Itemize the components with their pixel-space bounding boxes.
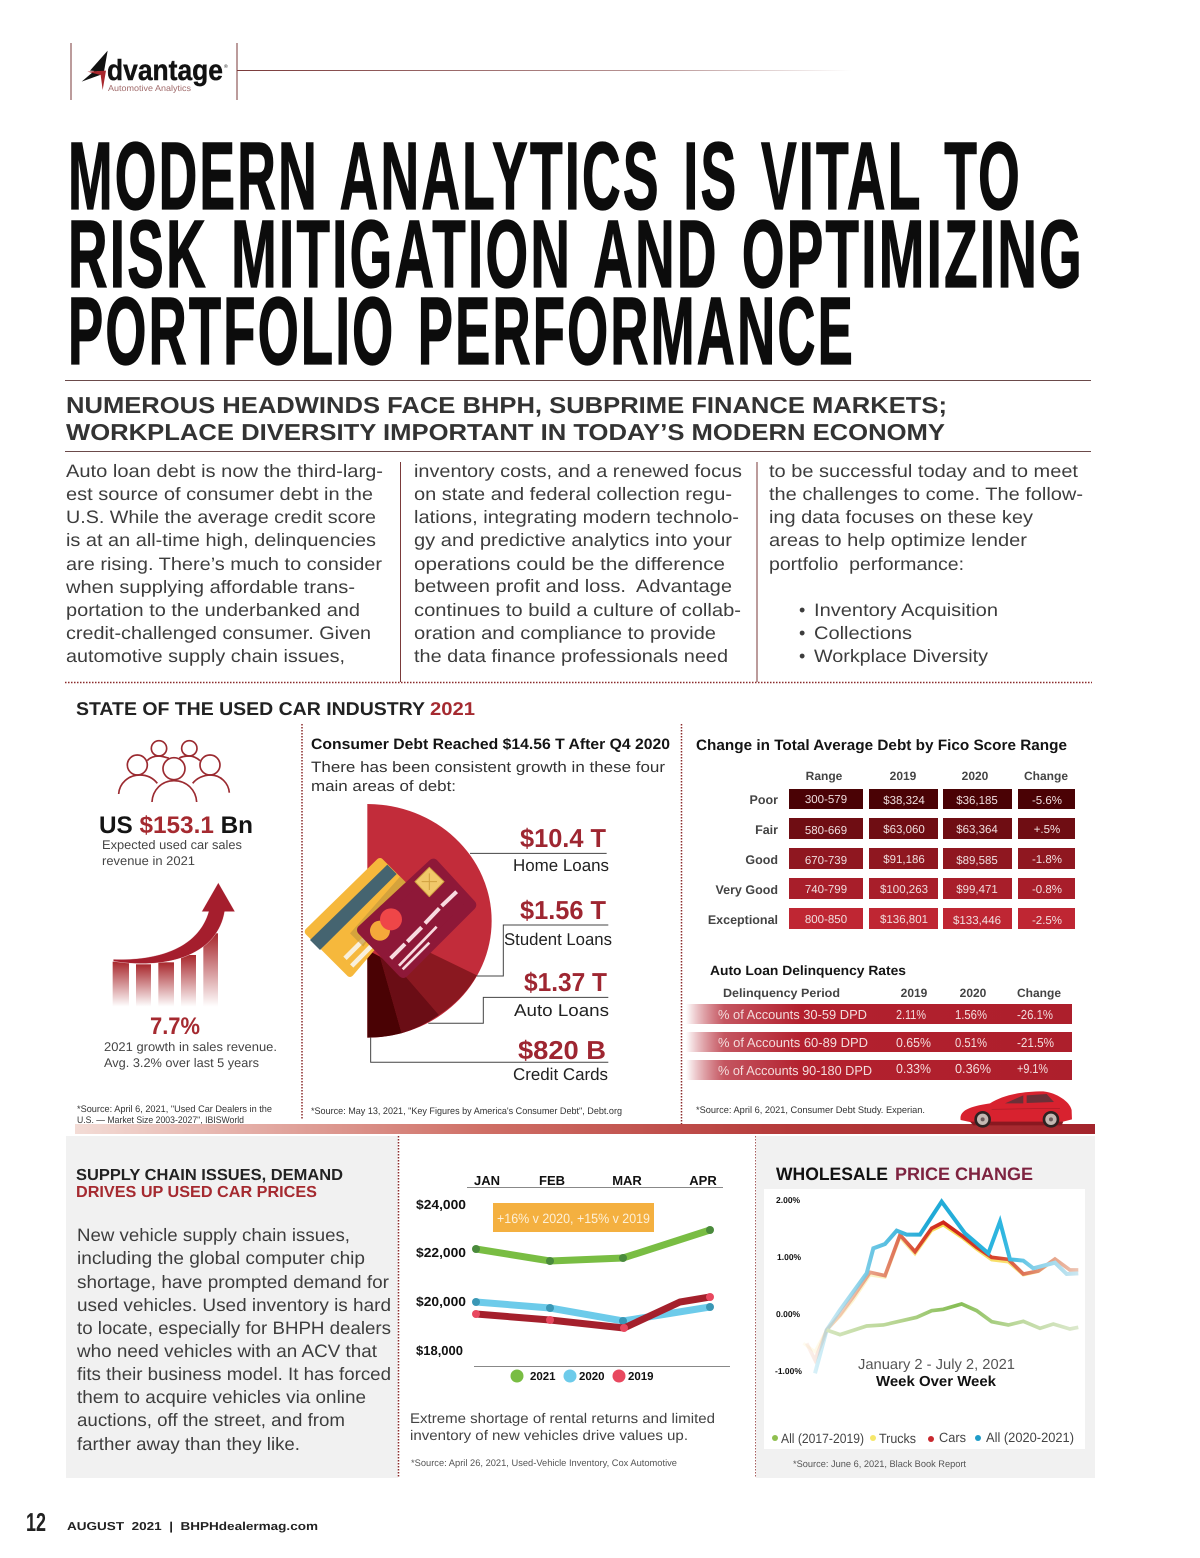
legend: Trucks <box>879 1431 916 1446</box>
body text: shortage, have prompted demand for <box>77 1272 389 1292</box>
row: poor: -5.6% <box>1032 795 1062 807</box>
row: poor: Poor <box>750 793 778 807</box>
intro text column 3 with bullets: Workplace Diversity <box>814 646 988 666</box>
legend: Cars <box>939 1430 966 1445</box>
row: fair: +.5% <box>1034 824 1060 836</box>
body text: used vehicles. Used inventory is hard <box>77 1295 391 1315</box>
label: home loans: Home Loans <box>513 856 609 875</box>
row: exceptional: 800-850 <box>805 914 847 926</box>
intro text column 3 with bullets: • <box>799 600 805 620</box>
caption: inventory of new vehicles drive values up. <box>410 1427 688 1443</box>
month axis: APR <box>689 1173 717 1188</box>
heading: Change in Total Average Debt by Fico Score Range <box>696 737 1067 754</box>
row: exceptional: Exceptional <box>708 913 778 927</box>
column headers: Change <box>1017 986 1061 1000</box>
row: good: Good <box>745 853 778 867</box>
row: good: $91,186 <box>883 854 925 866</box>
row: good <box>745 848 1075 869</box>
percentage axis: 2.00% <box>776 1195 801 1205</box>
caption: Extreme shortage of rental returns and limited <box>410 1410 715 1426</box>
callout: +16% v 2020, +15% v 2019 <box>497 1211 650 1226</box>
chart caption: Week Over Week <box>876 1374 997 1390</box>
heading: Auto Loan Delinquency Rates <box>710 963 906 978</box>
body text: New vehicle supply chain issues, <box>77 1225 350 1245</box>
intro text column 1: are rising. There’s much to consider <box>66 554 382 574</box>
label: home loans <box>513 823 609 875</box>
intro text column 3 with bullets: • <box>799 623 805 643</box>
line: 2021 <box>472 1226 714 1265</box>
row: very good: -0.8% <box>1032 884 1062 896</box>
intro text column 2: lations, integrating modern technolo- <box>414 507 739 527</box>
chart: week over week lines <box>803 1202 1078 1373</box>
row: 90-180 DPD: 0.36% <box>955 1061 991 1076</box>
heading: Consumer Debt Reached $14.56 T After Q4 2020 <box>311 736 670 753</box>
intro: There has been consistent growth in these four <box>311 759 665 776</box>
growth caption <box>104 1040 277 1070</box>
heading: PRICE CHANGE <box>895 1164 1033 1184</box>
heading: WHOLESALE <box>776 1164 888 1184</box>
row: poor: 300-579 <box>805 794 847 806</box>
row: very good: Very Good <box>715 883 778 897</box>
row: 90-180 DPD <box>686 1060 1072 1080</box>
intro text column 3 with bullets: the challenges to come. The follow- <box>769 484 1083 504</box>
intro: main areas of debt: <box>311 778 456 795</box>
row: 30-59 DPD: 2.11% <box>896 1007 926 1022</box>
row: good: 670-739 <box>805 855 847 867</box>
row: very good: $100,263 <box>880 884 928 896</box>
intro text column 1: is at an all-time high, delinquencies <box>66 530 376 550</box>
percentage axis <box>775 1195 802 1376</box>
price axis: $18,000 <box>416 1343 463 1358</box>
icon: yellow card <box>308 862 415 973</box>
heading <box>776 1164 1033 1184</box>
intro text column 1: U.S. While the average credit score <box>66 507 376 527</box>
percentage axis: 1.00% <box>777 1252 802 1262</box>
row: 60-89 DPD <box>686 1032 1072 1052</box>
section heading: state of the used car industry: 2021 <box>430 698 475 719</box>
label: student loans <box>504 895 612 949</box>
month axis <box>467 1173 730 1366</box>
row: 30-59 DPD: % of Accounts 30-59 DPD <box>718 1007 867 1022</box>
callout <box>493 1203 654 1232</box>
row: fair: 580-669 <box>805 825 847 837</box>
row: poor: $38,324 <box>883 795 925 807</box>
row: 60-89 DPD: 0.51% <box>955 1035 987 1050</box>
row: fair: Fair <box>755 823 778 837</box>
revenue caption <box>102 838 242 868</box>
row: poor <box>750 789 1075 809</box>
body text: including the global computer chip <box>77 1248 365 1268</box>
intro text column 2: oration and compliance to provide <box>414 623 716 643</box>
legend: 2019 <box>628 1371 654 1383</box>
month axis: JAN <box>474 1173 500 1188</box>
column headers <box>723 986 1061 1000</box>
intro text column 2: gy and predictive analytics into your <box>414 530 732 550</box>
body text: to locate, especially for BHPH dealers <box>77 1318 391 1338</box>
intro text column 1: automotive supply chain issues, <box>66 646 345 666</box>
intro text column 1 <box>65 461 383 666</box>
source note: *Source: April 6, 2021, Consumer Debt Study. Experian. <box>696 1105 925 1116</box>
intro text column 2: on state and federal collection regu- <box>414 484 732 504</box>
row: 30-59 DPD: 1.56% <box>955 1007 987 1022</box>
intro text column 3 with bullets: ing data focuses on these key <box>769 507 1033 527</box>
row: 60-89 DPD: -21.5% <box>1017 1035 1054 1050</box>
icon: maroon card <box>362 864 471 973</box>
intro text column 1: Auto loan debt is now the third-larg- <box>66 461 383 481</box>
leader lines <box>371 853 608 1062</box>
panel: auto loan delinquency rates <box>686 963 1072 1116</box>
column headers: 2019 <box>890 769 917 783</box>
row: fair <box>755 818 1075 839</box>
intro text column 3 with bullets: • <box>799 646 805 666</box>
column headers: 2019 <box>901 986 928 1000</box>
line: 2020 <box>472 1298 714 1325</box>
heading: DRIVES UP USED CAR PRICES <box>76 1184 317 1201</box>
growth figure: 7.7% <box>150 1013 200 1040</box>
legend: All (2020-2021) <box>986 1430 1074 1445</box>
source note: *Source: April 26, 2021, Used-Vehicle Inventory, Cox Automotive <box>411 1458 677 1469</box>
column headers: Delinquency Period <box>723 986 840 1000</box>
icon: group of people <box>119 741 229 802</box>
column headers: 2020 <box>962 769 989 783</box>
price axis: $20,000 <box>416 1294 466 1309</box>
body text: them to acquire vehicles via online <box>77 1387 366 1407</box>
row: very good: $99,471 <box>956 884 998 896</box>
revenue figure: US $153.1 Bn <box>99 812 253 839</box>
row: exceptional: $136,801 <box>880 914 928 926</box>
logo: Advantage Automotive Analytics: ® <box>224 64 228 70</box>
legend: All (2017-2019) <box>781 1431 864 1446</box>
panel: used vehicle price line chart <box>410 1173 730 1469</box>
label: credit cards: $820 B <box>518 1035 606 1065</box>
section heading: state of the used car industry: STATE OF THE USED CAR INDUSTRY <box>76 698 426 719</box>
icon: red car <box>960 1091 1072 1128</box>
source note: *Source: June 6, 2021, Black Book Report <box>793 1459 966 1470</box>
column headers: 2020 <box>960 986 987 1000</box>
row: exceptional: -2.5% <box>1032 915 1062 927</box>
panel: used car revenue <box>77 741 277 1126</box>
subheading: NUMEROUS HEADWINDS FACE BHPH, SUBPRIME FINANCE MARKETS; <box>66 392 947 418</box>
chart: debt fan with credit cards <box>308 804 608 1062</box>
label: auto loans <box>514 967 609 1020</box>
body text: farther away than they like. <box>77 1434 300 1454</box>
price axis: $22,000 <box>416 1245 466 1260</box>
source note: *Source: May 13, 2021, "Key Figures by America's Consumer Debt", Debt.org <box>311 1106 622 1117</box>
intro text column 3 with bullets: portfolio performance: <box>769 554 964 574</box>
label: student loans: $1.56 T <box>520 895 606 925</box>
body text: auctions, off the street, and from <box>77 1410 345 1430</box>
month axis: FEB <box>539 1173 565 1188</box>
legend <box>510 1370 654 1383</box>
revenue caption: revenue in 2021 <box>102 854 195 868</box>
growth caption: Avg. 3.2% over last 5 years <box>104 1056 259 1070</box>
heading: SUPPLY CHAIN ISSUES, DEMAND <box>76 1167 343 1184</box>
label: credit cards <box>513 1035 608 1084</box>
legend: 2021 <box>530 1371 556 1383</box>
label: auto loans: Auto Loans <box>514 1001 609 1020</box>
title <box>68 123 1084 385</box>
intro text column 2 <box>414 461 742 666</box>
price axis <box>416 1197 466 1358</box>
label: student loans: Student Loans <box>504 930 612 949</box>
intro text column 2: inventory costs, and a renewed focus <box>414 461 742 481</box>
row: 90-180 DPD: 0.33% <box>896 1061 931 1076</box>
line: 2019 <box>472 1293 714 1332</box>
panel: FICO debt table <box>696 737 1075 929</box>
intro text column 1: portation to the underbanked and <box>66 600 360 620</box>
row: 30-59 DPD <box>686 1004 1072 1024</box>
logo: Advantage Automotive Analytics <box>71 43 852 100</box>
row: 90-180 DPD: +9.1% <box>1017 1061 1048 1076</box>
caption <box>410 1410 715 1443</box>
row: very good <box>715 878 1075 899</box>
panel: wholesale price change <box>756 1136 1095 1478</box>
revenue caption: Expected used car sales <box>102 838 242 852</box>
label: credit cards: Credit Cards <box>513 1065 608 1084</box>
row: fair: $63,364 <box>956 824 998 836</box>
row: poor: $36,185 <box>956 795 998 807</box>
icon: growth bars and arrow <box>113 883 235 1007</box>
label: home loans: $10.4 T <box>520 823 606 853</box>
chart caption: January 2 - July 2, 2021 <box>858 1357 1015 1373</box>
row: exceptional: $133,446 <box>953 915 1001 927</box>
subheading: WORKPLACE DIVERSITY IMPORTANT IN TODAY’S MODERN ECONOMY <box>66 419 945 445</box>
column headers: Range <box>806 769 843 783</box>
intro text column 3 with bullets: to be successful today and to meet <box>769 461 1078 481</box>
logo: Advantage Automotive Analytics: Automotive Analytics <box>108 83 191 93</box>
intro text column 3 with bullets: areas to help optimize lender <box>769 530 1027 550</box>
panel: supply chain issues <box>66 1136 398 1478</box>
row: fair: $63,060 <box>883 824 925 836</box>
intro text column 1: est source of consumer debt in the <box>66 484 373 504</box>
growth caption: 2021 growth in sales revenue. <box>104 1040 277 1054</box>
month axis: MAR <box>612 1173 642 1188</box>
footer: AUGUST 2021 | BHPHdealermag.com <box>67 1521 318 1533</box>
column headers: Change <box>1024 769 1068 783</box>
source note <box>77 1104 272 1126</box>
row: exceptional <box>708 908 1075 929</box>
row: good: $89,585 <box>956 855 998 867</box>
legend: 2020 <box>579 1371 605 1383</box>
percentage axis: -1.00% <box>775 1366 802 1376</box>
price axis: $24,000 <box>416 1197 466 1212</box>
percentage axis: 0.00% <box>776 1309 801 1319</box>
row: 60-89 DPD: 0.65% <box>896 1035 931 1050</box>
intro text column 3 with bullets <box>769 461 1083 666</box>
intro text column 3 with bullets: Inventory Acquisition <box>814 600 998 620</box>
row: very good: 740-799 <box>805 884 847 896</box>
body text: fits their business model. It has forced <box>77 1364 391 1384</box>
source note: *Source: April 6, 2021, "Used Car Dealers in the <box>77 1104 272 1115</box>
intro text column 3 with bullets: Collections <box>814 623 912 643</box>
label: auto loans: $1.37 T <box>524 967 607 997</box>
row: 90-180 DPD: % of Accounts 90-180 DPD <box>718 1063 872 1078</box>
subheading <box>66 392 947 445</box>
intro <box>311 759 665 795</box>
row: good: -1.8% <box>1032 854 1062 866</box>
intro text column 1: credit-challenged consumer. Given <box>66 623 371 643</box>
column headers <box>806 769 1068 783</box>
source note: U.S. — Market Size 2003-2027", IBISWorld <box>77 1115 244 1126</box>
intro text column 2: between profit and loss. Advantage <box>414 576 732 596</box>
heading <box>76 1167 343 1201</box>
intro text column 2: operations could be the difference <box>414 554 725 574</box>
body text: who need vehicles with an ACV that <box>76 1341 377 1361</box>
row: 30-59 DPD: -26.1% <box>1017 1007 1053 1022</box>
row: 60-89 DPD: % of Accounts 60-89 DPD <box>718 1035 868 1050</box>
chart caption <box>858 1357 1015 1390</box>
intro text column 1: when supplying affordable trans- <box>65 577 355 597</box>
intro text column 2: the data finance professionals need <box>414 646 728 666</box>
legend <box>772 1430 1074 1446</box>
panel: consumer debt <box>308 736 670 1117</box>
intro text column 2: continues to build a culture of collab- <box>414 600 741 620</box>
logo: Advantage Automotive Analytics: dvantage <box>107 55 223 87</box>
body text <box>76 1225 391 1454</box>
section divider band <box>75 1124 1095 1134</box>
page number: 12 <box>26 1507 46 1537</box>
